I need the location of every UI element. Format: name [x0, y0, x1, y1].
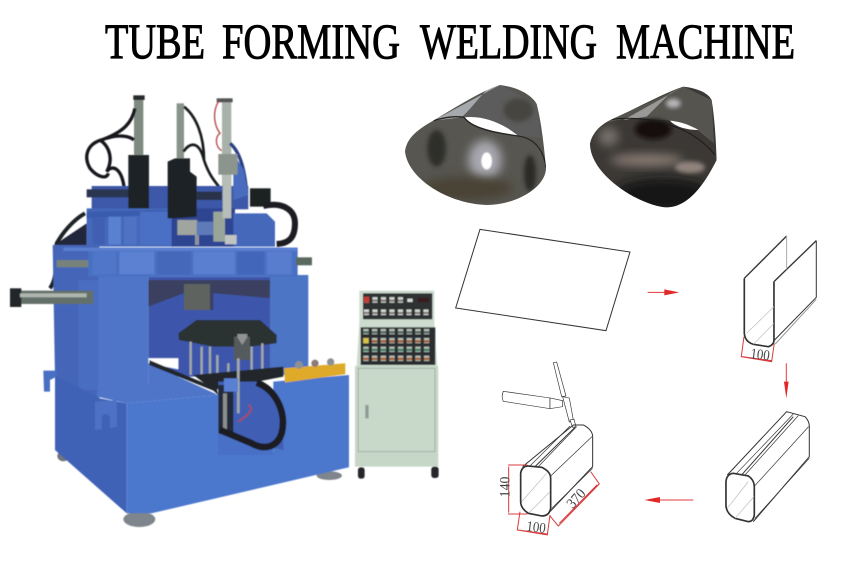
title: WELDING	[420, 13, 597, 69]
feet	[57, 451, 342, 527]
process diagram	[456, 229, 816, 537]
upper control panel	[363, 293, 432, 319]
formed metal parts	[403, 83, 718, 212]
machine photo illustration	[10, 95, 349, 527]
inner clamp block	[184, 284, 210, 310]
arrow down	[784, 363, 789, 398]
base	[43, 360, 349, 513]
door handle	[365, 405, 369, 418]
dimensions welded tube: 100	[526, 519, 547, 537]
arrow right	[648, 289, 679, 295]
flat sheet	[456, 229, 630, 331]
metal part left	[403, 83, 548, 207]
yellow block	[284, 358, 345, 383]
welding torch	[502, 362, 576, 427]
horizontal side cylinders	[10, 257, 312, 307]
dimension 100 top	[741, 337, 774, 364]
control cabinet	[355, 291, 439, 479]
cable chain right	[263, 205, 295, 244]
title: MACHINE	[616, 13, 795, 69]
cabinet opening under table	[218, 358, 283, 450]
dimensions welded tube: 140	[497, 477, 513, 497]
top stage	[87, 153, 275, 247]
title: FORMING	[222, 13, 400, 69]
dimensions welded tube	[497, 465, 599, 537]
dimension 100 top: 100	[749, 346, 771, 364]
title	[105, 13, 795, 69]
title: TUBE	[105, 13, 205, 69]
cylinders and hoses	[87, 95, 247, 218]
casters	[358, 467, 439, 479]
black carriages	[128, 154, 271, 218]
cable chain left	[50, 213, 85, 288]
lower button panel	[361, 327, 435, 365]
cabinet body	[355, 366, 438, 467]
welding fixture table	[178, 320, 283, 390]
dimensions welded tube: 370	[564, 486, 589, 512]
U-shaped formed sheet	[744, 236, 816, 347]
arrow left	[644, 497, 693, 503]
closed tube right	[726, 412, 809, 522]
metal part right	[588, 85, 718, 212]
drag chain lower	[220, 383, 283, 447]
welded tube left	[521, 425, 593, 516]
main frame	[53, 245, 308, 402]
cabinet door	[358, 368, 435, 452]
